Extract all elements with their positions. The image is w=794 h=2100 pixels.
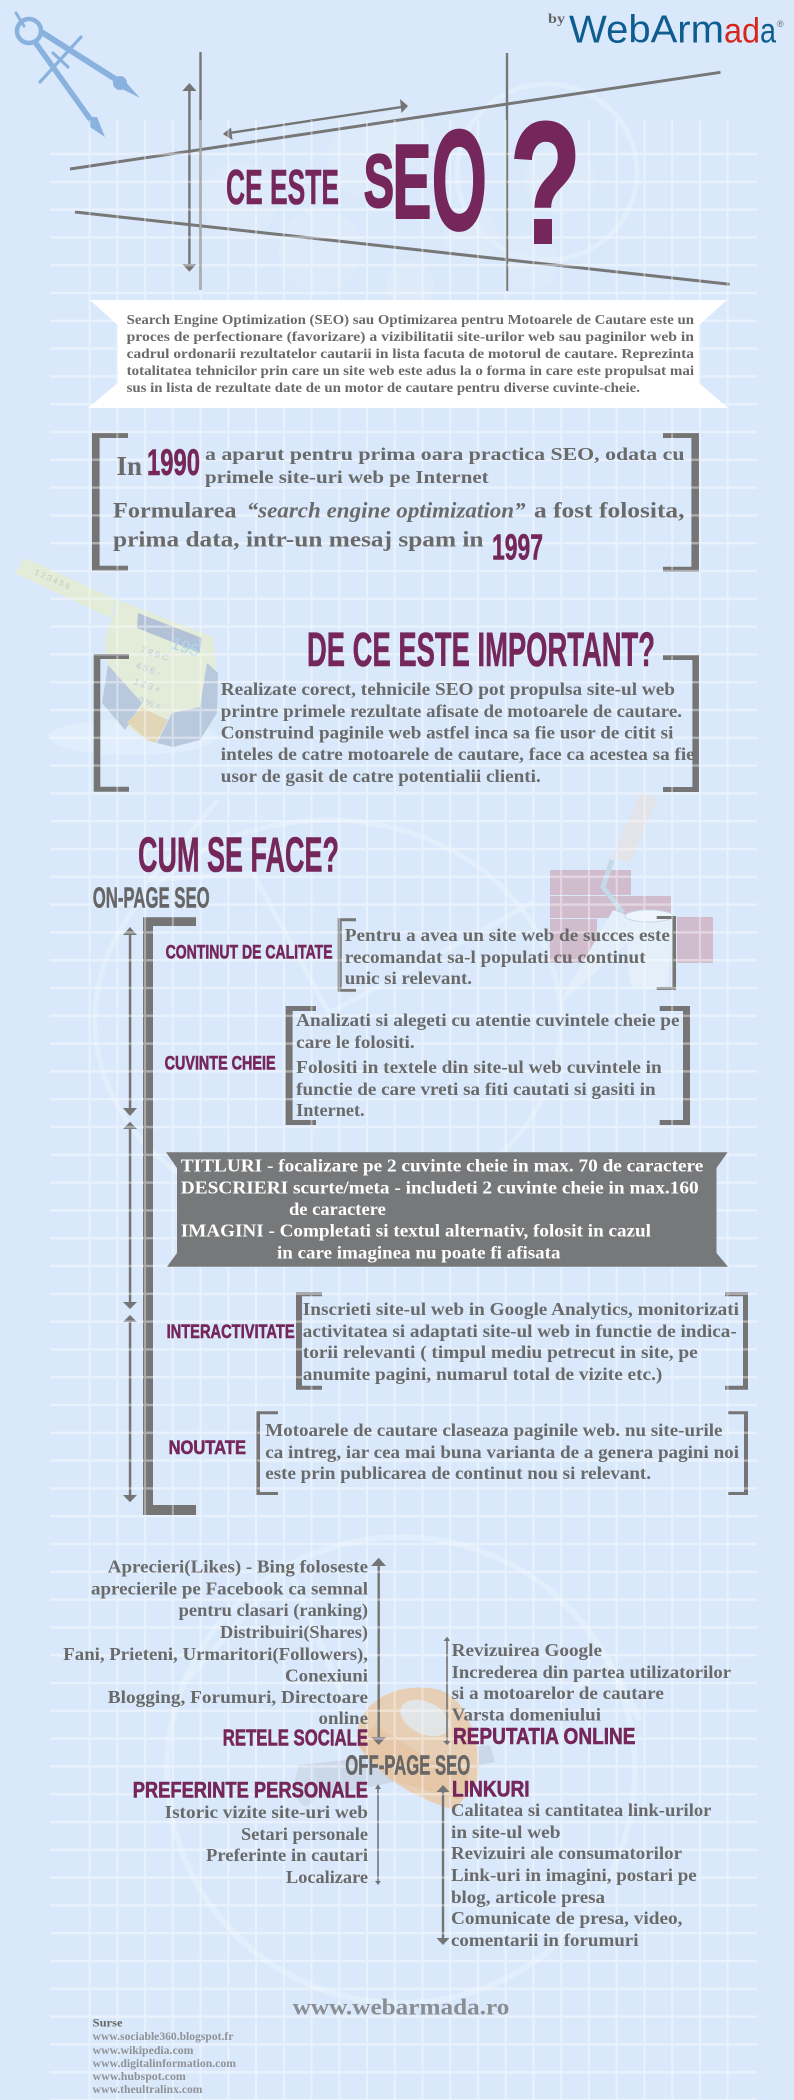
- panel: definition ribbon: Search Engine Optimization (SEO) sau Optimizarea pentru Motoarele de Cautare este un: [127, 313, 694, 328]
- label: reputatia online: REPUTATIA ONLINE: [453, 1723, 635, 1749]
- text block: retele sociale list: aprecierile pe Facebook ca semnal: [91, 1579, 368, 1599]
- text block: why important: usor de gasit de catre potentialii clienti.: [221, 766, 541, 786]
- text block: retele sociale list: Aprecieri(Likes) - Bing foloseste: [108, 1557, 368, 1577]
- bracket: history left: [92, 433, 128, 571]
- text block: history of SEO: Formularea: [113, 498, 236, 523]
- panel: titles, descriptions, images banner: IMAGINI - Completati si textul alternativ, folosit in cazul: [181, 1221, 651, 1241]
- bracket: continut right: [657, 916, 676, 990]
- text block: history of SEO: 1990: [147, 442, 200, 483]
- text block: why important: [221, 679, 695, 786]
- label: linkuri: LINKURI: [452, 1777, 530, 1802]
- text block: noutate: [265, 1420, 739, 1483]
- bracket: cuvinte left: [286, 1006, 316, 1125]
- bracket: on-page main: [143, 917, 196, 1515]
- text block: history of SEO: primele site-uri web pe Internet: [205, 467, 489, 487]
- heading: Cum se face: CUM SE FACE?: [138, 829, 339, 883]
- text block: noutate: Motoarele de cautare claseaza paginile web. nu site-urile: [265, 1420, 723, 1440]
- text block: reputatia online list: Varsta domeniului: [452, 1705, 601, 1725]
- icon: compass: [16, 13, 140, 137]
- text block: noutate: ca intreg, iar cea mai buna varianta de a genera pagini noi: [265, 1442, 739, 1462]
- bracket: interactivitate left: [296, 1292, 322, 1390]
- text block: interactivitate: Inscrieti site-ul web in Google Analytics, monitorizati: [303, 1299, 739, 1319]
- panel: definition ribbon: proces de perfectionare (favorizare) a vizibilitatii site-urilor web sau paginilor web in: [127, 330, 694, 345]
- text block: preferinte personale list: Localizare: [286, 1867, 368, 1887]
- text block: retele sociale list: online: [318, 1708, 368, 1728]
- text block: retele sociale list: Conexiuni: [285, 1666, 368, 1686]
- text block: reputatia online list: Increderea din partea utilizatorilor: [452, 1662, 731, 1682]
- icon: calculator and measuring tape: 1 2 3 +: [132, 676, 162, 694]
- text block: sources: www.sociable360.blogspot.fr: [93, 2031, 233, 2043]
- text block: history of SEO: “search engine optimization”: [247, 498, 526, 523]
- text block: preferinte personale list: [165, 1802, 368, 1887]
- text block: why important: Construind paginile web astfel inca sa fie usor de citit si: [221, 722, 674, 742]
- label: retele sociale: RETELE SOCIALE: [223, 1725, 368, 1751]
- text block: history of SEO: In: [116, 451, 142, 481]
- text block: sources: www.hubspot.com: [93, 2071, 186, 2083]
- text block: preferinte personale list: Preferinte in cautari: [206, 1845, 368, 1865]
- heading: On-page SEO: ON-PAGE SEO: [93, 883, 210, 915]
- panel: titles, descriptions, images banner: [166, 1152, 728, 1267]
- arrow: on-page 1: [123, 927, 137, 1116]
- text block: cuvinte cheie: Folositi in textele din site-ul web cuvintele in: [296, 1057, 662, 1077]
- bracket: cuvinte right: [660, 1006, 690, 1125]
- heading: Off-page SEO: OFF-PAGE SEO: [345, 1749, 470, 1780]
- icon: logo WebArmada: ®: [777, 19, 784, 29]
- panel: definition ribbon: cadrul ordonarii rezultatelor cautarii in lista facuta de motorul de cautare. Reprezinta: [127, 347, 694, 362]
- panel: titles, descriptions, images banner: in care imaginea nu poate fi afisata: [277, 1242, 561, 1262]
- label: continut de calitate: CONTINUT DE CALITATE: [166, 942, 333, 963]
- panel: definition ribbon: sus in lista de rezultate date de un motor de cautare pentru diverse cuvinte-cheie.: [127, 381, 640, 396]
- text block: retele sociale list: Blogging, Forumuri, Directoare: [108, 1687, 368, 1707]
- text block: sources: www.wikipedia.com: [93, 2045, 194, 2057]
- panel: definition ribbon: [88, 300, 728, 408]
- label: cuvinte cheie: CUVINTE CHEIE: [165, 1053, 276, 1074]
- text block: sources: Surse: [93, 2016, 123, 2030]
- icon: calculator and measuring tape: 195: [169, 634, 202, 661]
- text block: reputatia online list: si a motoarelor de cautare: [452, 1683, 664, 1703]
- bracket: noutate left: [256, 1411, 278, 1495]
- text block: retele sociale list: Fani, Prieteni, Urmaritori(Followers),: [63, 1644, 368, 1664]
- panel: definition ribbon: totalitatea tehnicilor prin care un site web este adus la o forma in care este propulsat mai: [127, 364, 694, 379]
- title: Ce este SEO?: S: [364, 139, 394, 223]
- text block: interactivitate: activitatea si adaptati site-ul web in functie de indica-: [303, 1321, 737, 1341]
- text block: retele sociale list: Distribuiri(Shares): [220, 1622, 368, 1642]
- text block: history of SEO: a fost folosita,: [534, 498, 684, 523]
- bracket: importance left: [94, 654, 129, 792]
- text block: noutate: este prin publicarea de continut nou si relevant.: [265, 1463, 651, 1483]
- text block: interactivitate: [303, 1299, 739, 1384]
- icon: logo WebArmada: ad: [724, 12, 760, 50]
- arrow: reputatia online: [443, 1637, 451, 1745]
- label: noutate: NOUTATE: [169, 1438, 246, 1459]
- text block: linkuri list: comentarii in forumuri: [451, 1930, 639, 1950]
- icon: calculator and measuring tape: x 0 % =: [130, 692, 162, 711]
- text block: linkuri list: Revizuiri ale consumatorilor: [451, 1843, 682, 1863]
- text block: linkuri list: [451, 1800, 712, 1950]
- icon: calculator and measuring tape: 1 2 3 4 5 6: [33, 568, 72, 591]
- icon: hard hat and blueprint roll: [295, 1687, 495, 1810]
- title: Ce este SEO?: CE ESTE: [226, 161, 339, 215]
- text block: why important: Realizate corect, tehnicile SEO pot propulsa site-ul web: [221, 679, 675, 699]
- panel: titles, descriptions, images banner: TITLURI - focalizare pe 2 cuvinte cheie in max. 70 de caractere: [181, 1156, 704, 1176]
- arrow: retele sociale: [371, 1558, 386, 1745]
- text block: cuvinte cheie: Analizati si alegeti cu atentie cuvintele cheie pe: [296, 1010, 680, 1030]
- icon: logo WebArmada: a: [760, 12, 776, 50]
- text block: history of SEO: prima data, intr-un mesaj spam in: [113, 527, 484, 552]
- icon: logo WebArmada: [548, 8, 784, 52]
- text block: sources: www.theultralinx.com: [93, 2084, 203, 2096]
- text block: linkuri list: Calitatea si cantitatea link-urilor: [451, 1800, 712, 1820]
- arrow: on-page 2: [123, 1122, 137, 1309]
- title: Ce este SEO?: O: [432, 102, 487, 260]
- text block: cuvinte cheie: care le folositi.: [296, 1032, 415, 1052]
- bracket: noutate right: [728, 1411, 748, 1495]
- text block: continut de calitate: Pentru a avea un site web de succes este: [345, 925, 670, 945]
- icon: logo WebArmada: WebArm: [569, 8, 724, 52]
- text block: retele sociale list: [63, 1557, 368, 1728]
- text block: continut de calitate: unic si relevant.: [345, 968, 472, 988]
- text block: interactivitate: anumite pagini, numarul total de vizite etc.): [303, 1364, 662, 1384]
- website address: www.webarmada.ro: [293, 1994, 509, 2019]
- panel: titles, descriptions, images banner: de caractere: [289, 1199, 386, 1219]
- text block: linkuri list: Link-uri in imagini, postari pe: [451, 1865, 697, 1885]
- arrow: preferinte personale: [375, 1784, 381, 1885]
- icon: logo WebArmada: by: [548, 12, 565, 27]
- text block: preferinte personale list: Setari personale: [241, 1824, 368, 1844]
- text block: continut de calitate: recomandat sa-l populati cu continut: [345, 947, 646, 967]
- label: preferinte personale: PREFERINTE PERSONALE: [133, 1778, 368, 1803]
- panel: titles, descriptions, images banner: DESCRIERI scurte/meta - includeti 2 cuvinte cheie in max.160: [181, 1178, 699, 1198]
- text block: reputatia online list: Revizuirea Google: [452, 1640, 602, 1660]
- background decoration: circles and clouds: [95, 84, 640, 2003]
- label: interactivitate: INTERACTIVITATE: [167, 1322, 295, 1343]
- text block: linkuri list: blog, articole presa: [451, 1887, 605, 1907]
- text block: retele sociale list: pentru clasari (ranking): [179, 1600, 368, 1620]
- text block: cuvinte cheie: [296, 1010, 680, 1120]
- title construction lines: [70, 52, 730, 291]
- text block: continut de calitate: [345, 925, 670, 988]
- bracket: importance right: [663, 655, 699, 792]
- icon: calculator and measuring tape: [15, 558, 218, 755]
- text block: interactivitate: torii relevanti ( timpul mediu petrecut in site, pe: [303, 1342, 698, 1362]
- title: Ce este SEO?: ?: [510, 85, 582, 280]
- text block: cuvinte cheie: Internet.: [296, 1100, 365, 1120]
- text block: why important: inteles de catre motoarele de cautare, face ca acestea sa fie: [221, 744, 695, 764]
- bracket: history right: [663, 433, 699, 572]
- text block: preferinte personale list: Istoric vizite site-uri web: [165, 1802, 368, 1822]
- text block: reputatia online list: [452, 1640, 731, 1725]
- title: Ce este SEO?: E: [392, 123, 431, 241]
- bracket: continut left: [338, 918, 356, 992]
- icon: calculator and measuring tape: 4 5 6 -: [134, 660, 162, 678]
- text block: why important: printre primele rezultate afisate de motoarele de cautare.: [221, 701, 682, 721]
- text block: history of SEO: [113, 442, 685, 567]
- text block: history of SEO: a aparut pentru prima oara practica SEO, odata cu: [205, 444, 685, 464]
- arrow: vertical title dimension: [182, 83, 196, 272]
- icon: bricks, trowel and bucket: [550, 793, 713, 1007]
- bracket: interactivitate right: [725, 1292, 748, 1390]
- icon: calculator and measuring tape: 7 8 9 C: [139, 644, 171, 663]
- title: Ce este SEO?: [226, 85, 582, 280]
- text block: cuvinte cheie: functie de care vreti sa fiti cautati si gasiti in: [296, 1079, 656, 1099]
- text block: linkuri list: Comunicate de presa, video,: [451, 1908, 682, 1928]
- text block: history of SEO: 1997: [492, 526, 543, 567]
- text block: sources: www.digitalinformation.com: [93, 2058, 236, 2070]
- text block: sources: [93, 2016, 236, 2096]
- text block: linkuri list: in site-ul web: [451, 1822, 561, 1842]
- arrow: on-page 3: [123, 1315, 137, 1502]
- arrow: slanted title dimension: [223, 99, 408, 140]
- arrow: linkuri: [436, 1785, 450, 1945]
